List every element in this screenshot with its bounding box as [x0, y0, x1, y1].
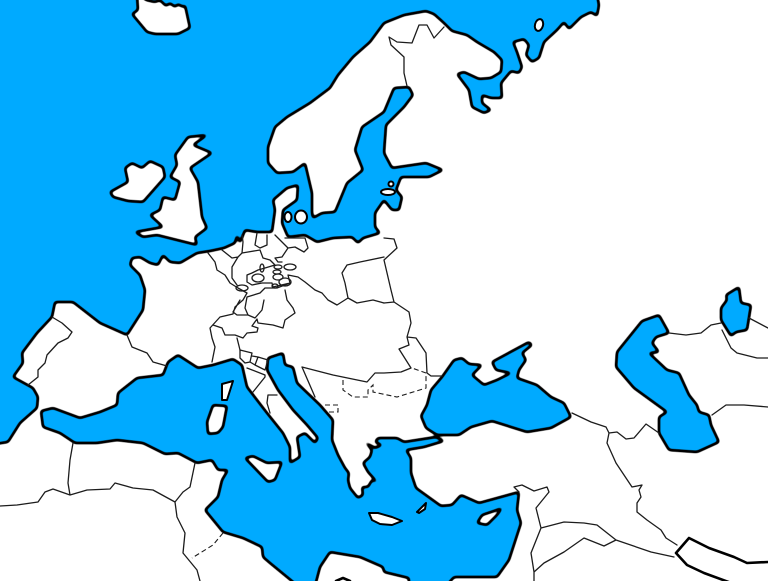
- border: Finland: [389, 25, 444, 86]
- coast: Red Sea tip: [336, 578, 350, 581]
- island: Corsica: [222, 381, 233, 400]
- borders: Central Asia: [669, 318, 768, 415]
- sea: Caspian Sea: [616, 315, 719, 452]
- island: Funen: [284, 212, 292, 222]
- island: Ireland: [110, 161, 165, 202]
- island: Great Britain: [135, 135, 212, 245]
- island: Cyprus: [477, 508, 502, 525]
- borders: Caucasus and Persia: [572, 413, 677, 545]
- borders: Middle East: [514, 485, 674, 581]
- large islands: [110, 0, 502, 525]
- borders: Central Europe: [208, 233, 384, 362]
- island: Rhodes: [417, 503, 426, 513]
- island: Sicily: [245, 456, 282, 482]
- sea: Black Sea: [421, 342, 571, 435]
- island: Zealand: [295, 210, 307, 224]
- island: Gotland: [388, 182, 394, 186]
- borders: Iberia: [28, 317, 167, 385]
- borders: Balkans: [302, 238, 442, 397]
- island: Crete: [369, 513, 402, 525]
- island: Saaremaa: [381, 189, 395, 195]
- sea: Atlantic, North Sea, Baltic and Arctic: [0, 0, 599, 444]
- borders: North Africa: [0, 443, 200, 581]
- coast: Persian Gulf: [676, 538, 768, 581]
- island: Kolguev: [534, 18, 544, 32]
- border: Libya dashed: [192, 533, 223, 558]
- sea: Mediterranean: [41, 353, 521, 581]
- sea: Aral Sea: [721, 287, 751, 336]
- island: Iceland: [132, 0, 190, 34]
- island: Sardinia: [207, 405, 227, 434]
- borders: Balkans dashed: [325, 368, 426, 412]
- borders: small German states: [236, 264, 296, 291]
- borders: Italy: [240, 350, 277, 413]
